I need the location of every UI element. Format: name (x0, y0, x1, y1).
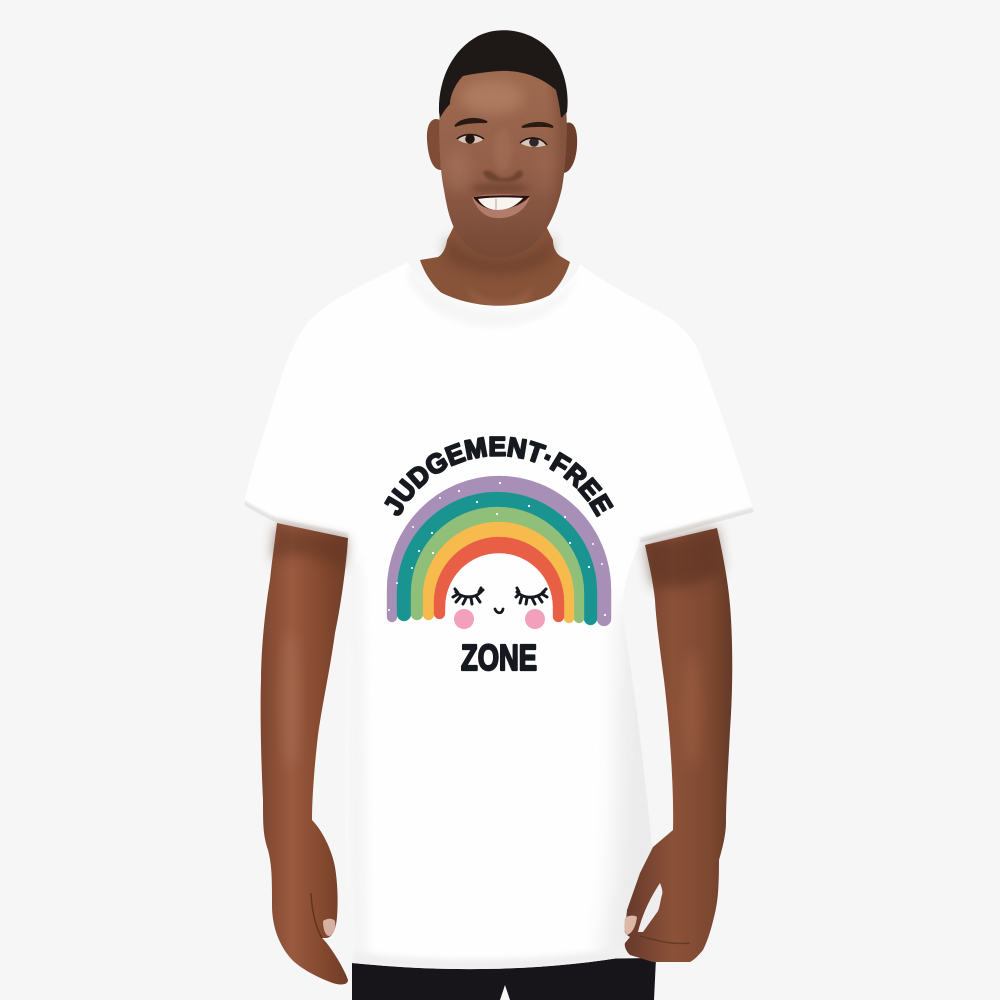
rainbow (387, 476, 611, 626)
nose (483, 170, 523, 181)
right cheek (525, 609, 545, 629)
left eye lashes (453, 588, 483, 604)
right eye lashes (516, 588, 547, 604)
right arm (624, 528, 732, 962)
neck (420, 222, 570, 316)
eyebrows (455, 119, 553, 127)
hair (439, 30, 568, 118)
shirt fold shading (244, 262, 755, 972)
product photo: man wearing printed t-shirt (244, 30, 754, 1000)
left cheek (454, 609, 474, 629)
left arm (261, 523, 348, 984)
head with ears (427, 30, 577, 258)
curved heading: JUDGEMENT·FREE (384, 436, 614, 518)
eyes (457, 134, 547, 147)
black trousers (352, 958, 656, 1000)
sparkles (388, 482, 606, 616)
smile (495, 609, 503, 613)
face (439, 50, 567, 258)
white long t-shirt (244, 262, 755, 972)
ears (427, 119, 577, 173)
ZONE caption: ZONE (461, 637, 537, 678)
sleeping face (453, 588, 547, 629)
smile (472, 194, 530, 218)
printed design (384, 436, 614, 678)
